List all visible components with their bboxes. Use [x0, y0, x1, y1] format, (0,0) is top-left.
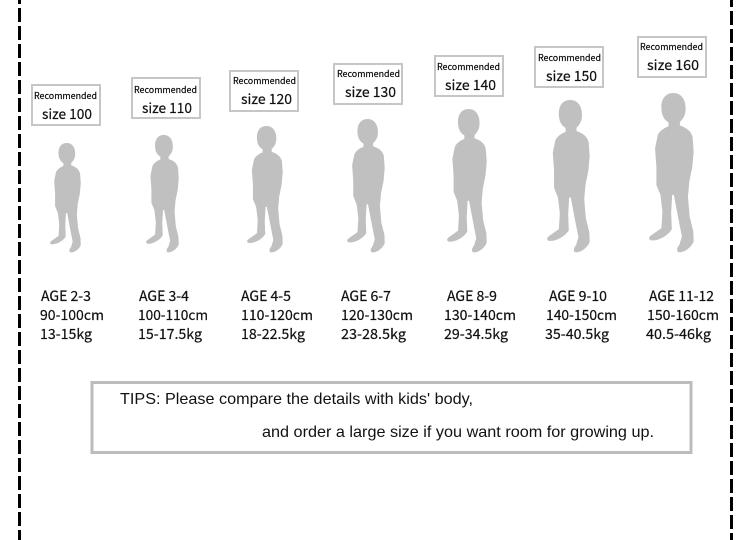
size label 130: size 130: [345, 82, 396, 102]
size label 100: [32, 85, 100, 125]
measurements: age 6-7: [341, 286, 413, 344]
size label 120: [230, 71, 298, 111]
silhouette: child 160: [649, 93, 694, 252]
tips box: TIPS: Please compare the details with kids' body,: [120, 391, 473, 408]
left dashed border: [18, 0, 21, 540]
tips box: and order a large size if you want room for growing up.: [262, 424, 654, 441]
size label 130: [334, 64, 402, 104]
silhouette: child 120: [247, 126, 283, 252]
size label 160: Recommended: [640, 40, 703, 53]
measurements: age 3-4: 100-110cm: [138, 305, 208, 325]
size label 110: [132, 78, 200, 118]
size label 110: Recommended: [134, 83, 197, 96]
measurements: age 3-4: [138, 286, 208, 344]
measurements: age 9-10: 140-150cm: [546, 305, 617, 325]
measurements: age 2-3: 13-15kg: [40, 324, 92, 344]
measurements: age 2-3: AGE 2-3: [41, 286, 91, 306]
size label 100: size 100: [42, 104, 92, 124]
silhouette: child 150: [547, 100, 590, 252]
measurements: age 3-4: AGE 3-4: [139, 286, 189, 306]
measurements: age 4-5: AGE 4-5: [241, 286, 291, 306]
measurements: age 4-5: 18-22.5kg: [241, 324, 305, 344]
silhouette: child 130: [347, 119, 385, 252]
size label 120: size 120: [241, 89, 292, 109]
size label 150: size 150: [546, 66, 597, 86]
right dashed border: [730, 0, 733, 540]
measurements: age 9-10: [545, 286, 617, 344]
silhouette: child 140: [447, 109, 487, 252]
silhouette: child 110: [146, 135, 179, 253]
measurements: age 8-9: 29-34.5kg: [444, 324, 508, 344]
measurements: age 6-7: 23-28.5kg: [341, 324, 406, 344]
size label 150: [535, 47, 603, 87]
measurements: age 11-12: 150-160cm: [647, 305, 719, 325]
size label 140: Recommended: [437, 60, 500, 73]
tips box: [92, 382, 691, 452]
size label 160: [638, 37, 706, 77]
measurements: age 6-7: AGE 6-7: [341, 286, 391, 306]
measurements: age 6-7: 120-130cm: [341, 305, 413, 325]
measurements: age 4-5: [241, 286, 313, 344]
measurements: age 8-9: AGE 8-9: [447, 286, 497, 306]
measurements: age 11-12: 40.5-46kg: [646, 324, 711, 344]
measurements: age 11-12: AGE 11-12: [649, 286, 714, 306]
size label 150: Recommended: [538, 51, 601, 64]
measurements: age 9-10: 35-40.5kg: [545, 324, 609, 344]
size label 130: Recommended: [337, 67, 400, 80]
measurements: age 8-9: 130-140cm: [444, 305, 516, 325]
size label 140: [435, 56, 503, 96]
size label 140: size 140: [445, 75, 496, 95]
measurements: age 8-9: [444, 286, 516, 344]
measurements: age 11-12: [646, 286, 719, 344]
size label 160: size 160: [647, 55, 699, 75]
measurements: age 2-3: 90-100cm: [40, 305, 104, 325]
size label 100: Recommended: [34, 89, 97, 102]
measurements: age 9-10: AGE 9-10: [549, 286, 607, 306]
size label 120: Recommended: [233, 74, 296, 87]
silhouette: child 100: [50, 143, 81, 253]
measurements: age 4-5: 110-120cm: [241, 305, 313, 325]
size label 110: size 110: [142, 98, 192, 118]
measurements: age 3-4: 15-17.5kg: [138, 324, 202, 344]
measurements: age 2-3: [40, 286, 104, 344]
